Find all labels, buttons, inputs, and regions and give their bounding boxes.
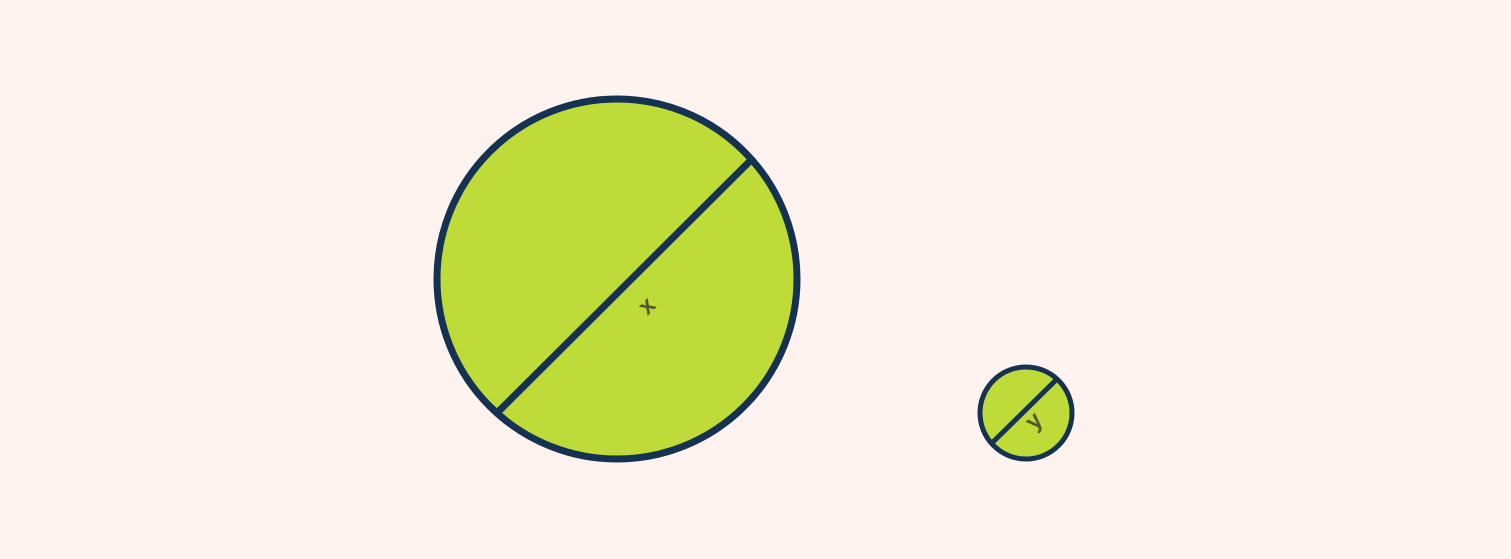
large circle with diameter x [437, 99, 797, 459]
label x: x [633, 291, 662, 320]
label y: y [1020, 406, 1049, 435]
small circle with diameter y [980, 367, 1072, 459]
